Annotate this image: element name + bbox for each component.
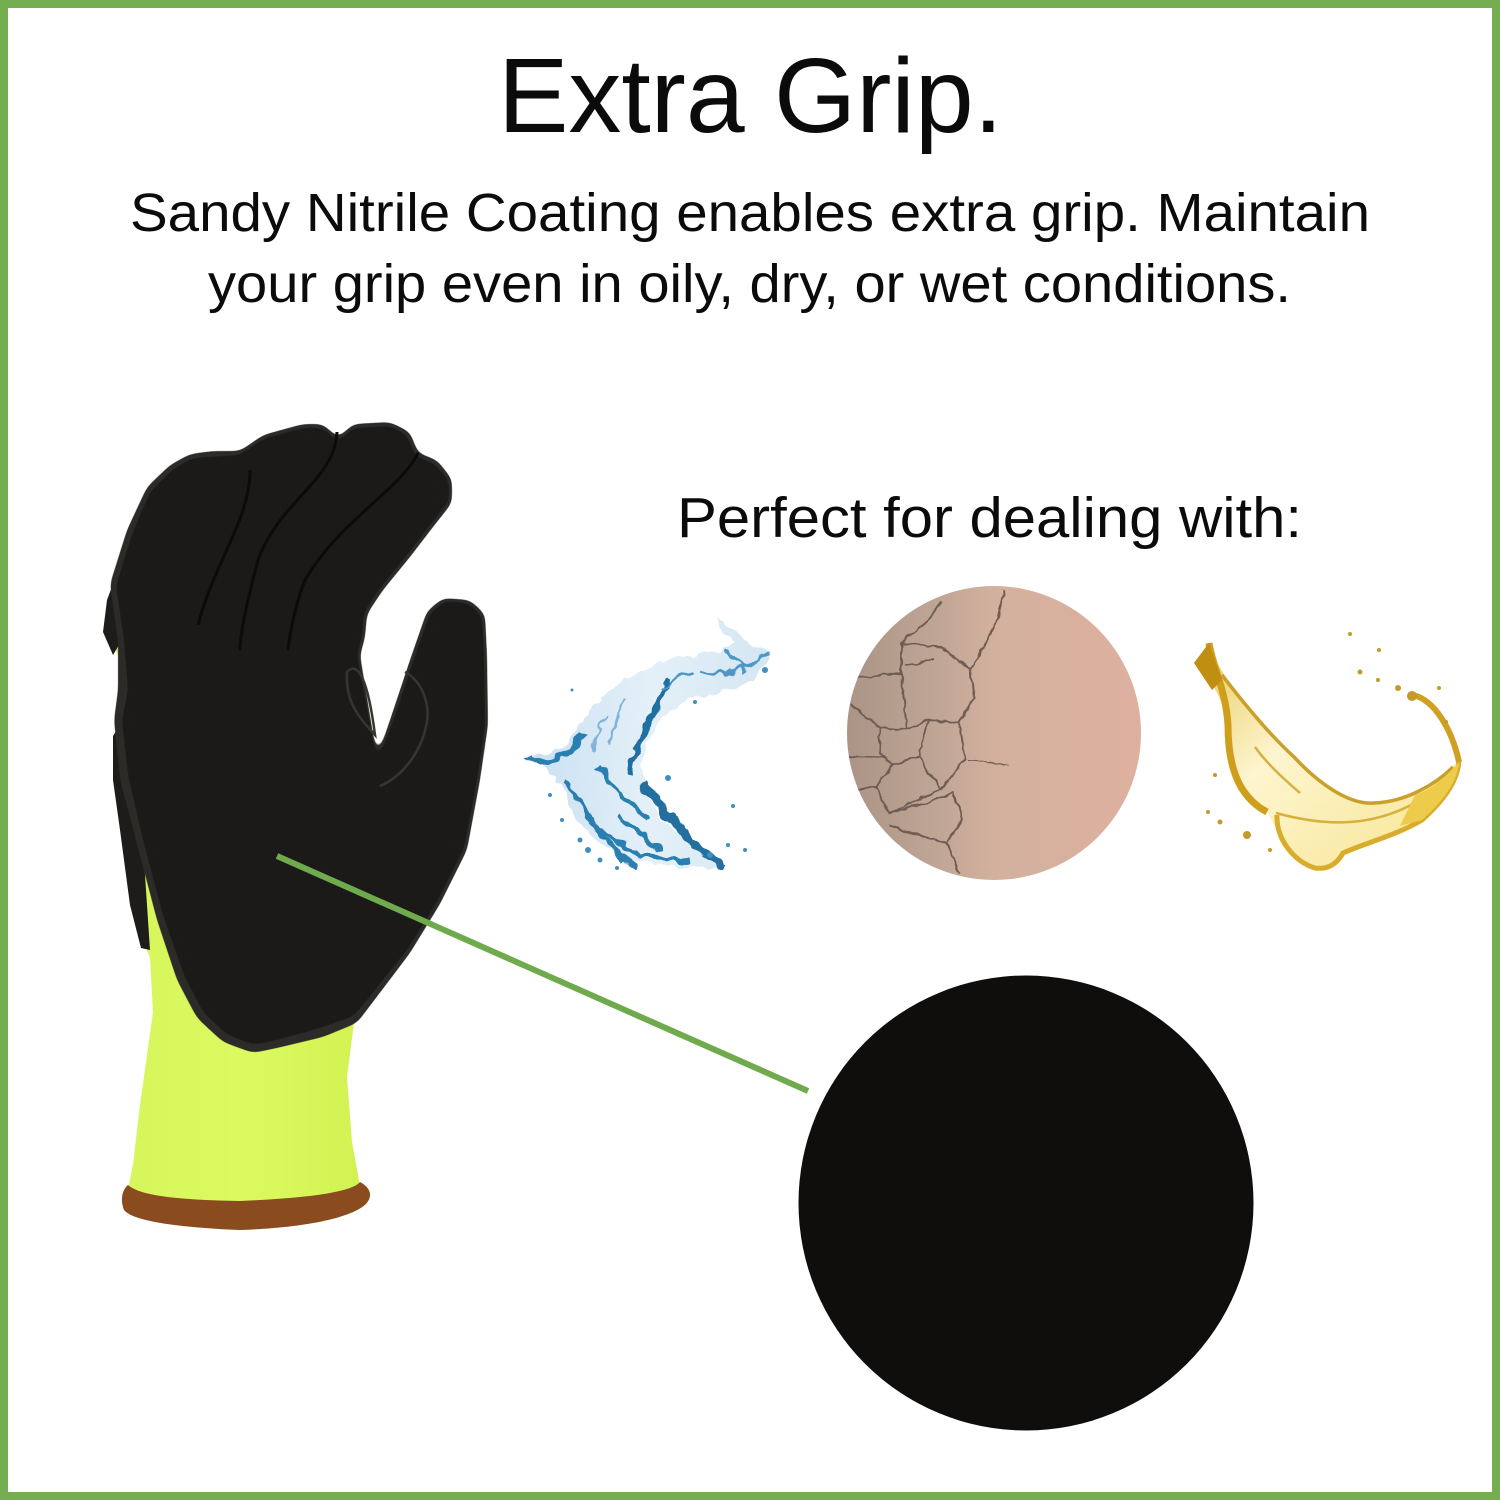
swatch: sandy nitrile close-up xyxy=(798,976,1254,1430)
swatch: dry cracked skin xyxy=(847,586,1141,880)
cuff hem xyxy=(122,1182,370,1230)
description text: your grip even in oily, dry, or wet conditions. xyxy=(208,254,1291,314)
finger creases xyxy=(198,432,418,650)
glove palm coating xyxy=(116,426,485,1045)
subheading: Perfect for dealing with: xyxy=(677,486,1302,550)
thumb patch xyxy=(347,669,428,786)
icon: oil splash xyxy=(1194,632,1459,870)
back of glove edge xyxy=(103,560,150,950)
callout line xyxy=(277,856,808,1091)
description text: Sandy Nitrile Coating enables extra grip. Maintain xyxy=(130,183,1370,243)
glove illustration xyxy=(103,422,488,1230)
title: Extra Grip. xyxy=(498,37,1003,155)
glove cuff xyxy=(104,622,360,1205)
description text xyxy=(130,183,1370,314)
glove rim xyxy=(110,422,488,1053)
icon: water splash xyxy=(529,615,771,870)
